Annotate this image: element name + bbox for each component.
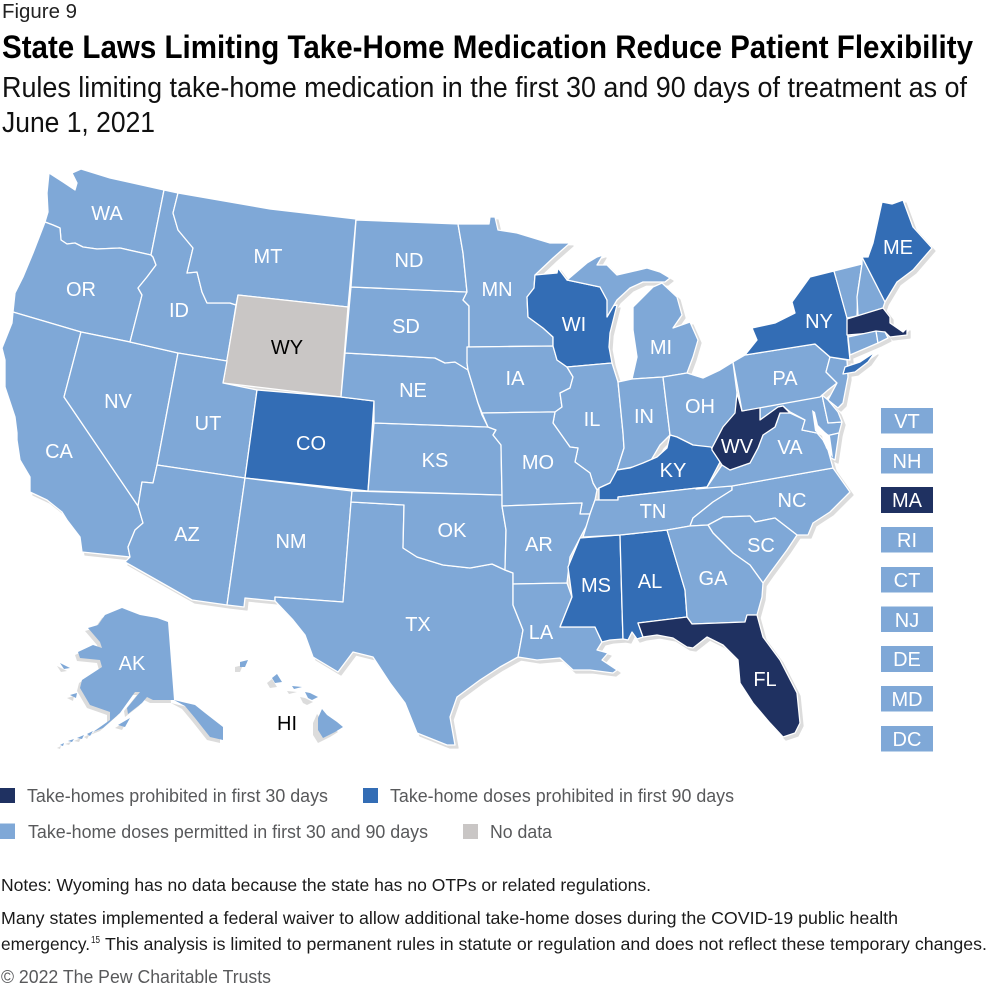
label: IN: IN — [634, 406, 654, 428]
legend item: prohibited first 30 days: Take-homes prohibited in first 30 days — [27, 786, 328, 806]
state abbreviations — [45, 203, 913, 735]
state: TN — [583, 486, 732, 537]
notes: Many states implemented a federal waiver to allow additional take-home doses during the COVID-19 public health — [1, 908, 898, 928]
state: OK — [351, 491, 506, 570]
state: NC — [690, 468, 850, 535]
state: NH — [857, 257, 885, 316]
legend item: prohibited first 90 days: Take-home doses prohibited in first 90 days — [390, 786, 734, 806]
state: AZ — [125, 465, 245, 605]
notes: 15 — [91, 935, 100, 946]
state: PA — [733, 344, 837, 411]
state: WI — [527, 268, 617, 367]
subtitle: June 1, 2021 — [2, 107, 155, 139]
state: OR — [13, 222, 156, 342]
Chesapeake Bay — [812, 410, 833, 458]
state: MT — [173, 193, 356, 307]
state: TX — [275, 502, 523, 745]
label: MI: MI — [650, 337, 672, 359]
state: ND — [351, 220, 467, 292]
state: VT — [834, 264, 862, 318]
state: CO — [245, 390, 374, 491]
state: ID — [130, 190, 236, 361]
key: VT: VT — [894, 411, 920, 433]
figure label: Figure 9 — [2, 1, 77, 23]
label: IL: IL — [584, 409, 600, 431]
map: contiguous United States — [2, 169, 932, 745]
state: MO — [482, 412, 597, 514]
map: Alaska — [60, 608, 223, 746]
state: KS — [368, 423, 502, 495]
label: SC: SC — [747, 535, 775, 557]
state: CT — [848, 331, 878, 355]
state: IN — [617, 377, 670, 470]
label: ID: ID — [169, 300, 189, 322]
small-state key — [881, 408, 933, 752]
notes: Notes: Wyoming has no data because the state has no OTPs or related regulations. — [1, 875, 651, 895]
key: NH — [881, 448, 933, 474]
notes — [1, 875, 987, 954]
HI Oahu — [272, 674, 282, 683]
state: SD — [345, 287, 469, 370]
key: VT — [881, 408, 933, 434]
key: DE — [881, 646, 933, 672]
label: OH: OH — [685, 396, 715, 418]
label: AL: AL — [638, 571, 662, 593]
label: NE: NE — [399, 380, 427, 402]
label: MO: MO — [522, 452, 554, 474]
state: MD — [742, 395, 842, 436]
label: CA: CA — [45, 441, 74, 463]
state: ME — [862, 200, 932, 302]
key: MD — [881, 686, 933, 712]
AK Kodiak and islands — [60, 663, 130, 746]
HI Big Island — [318, 709, 343, 738]
label: ME: ME — [883, 237, 913, 259]
label: MT: MT — [254, 246, 282, 268]
state: WA — [45, 169, 164, 255]
HI Kauai — [240, 660, 248, 667]
state: NV — [64, 332, 178, 506]
state: WY — [223, 295, 348, 397]
state: SC — [708, 516, 797, 583]
state: IL — [553, 363, 624, 490]
label: KY: KY — [660, 460, 686, 482]
state: AK mainland — [78, 608, 174, 732]
label: MN: MN — [481, 279, 513, 301]
label: FL: FL — [753, 669, 777, 691]
label: WY: WY — [271, 337, 303, 359]
label: TN: TN — [640, 501, 666, 523]
state: FL — [638, 615, 800, 737]
state: NE — [341, 353, 488, 427]
label: ND: ND — [395, 250, 423, 272]
copyright: © 2022 The Pew Charitable Trusts — [1, 967, 271, 987]
label: WI: WI — [562, 314, 586, 336]
label: NM: NM — [275, 531, 307, 553]
state: RI — [876, 331, 888, 343]
label: NY: NY — [805, 311, 833, 333]
state: NJ — [826, 357, 848, 408]
label: WA: WA — [91, 203, 123, 225]
state: MN — [458, 217, 570, 347]
label: SD: SD — [392, 316, 420, 338]
key: MA — [881, 487, 933, 513]
legend item: no data — [463, 822, 553, 842]
key: CT — [881, 567, 933, 592]
key: DE: DE — [893, 649, 921, 671]
label: KS: KS — [422, 450, 448, 472]
notes: This analysis is limited to permanent rules in statute or regulation and does not reflect these temporary changes. — [105, 934, 987, 954]
key: RI — [881, 527, 933, 552]
state: DE — [822, 395, 842, 423]
state: NY — [745, 271, 850, 360]
AK panhandle — [174, 700, 223, 740]
legend — [0, 786, 734, 842]
state: GA — [667, 525, 763, 624]
label: TX: TX — [405, 614, 431, 636]
subtitle — [2, 72, 968, 139]
state: AR — [502, 503, 590, 584]
state: MI upper peninsula — [567, 255, 670, 317]
state: VA eastern shore — [826, 433, 839, 460]
label: PA: PA — [772, 368, 798, 390]
key: MD: MD — [891, 689, 923, 711]
legend item: no data: No data — [490, 822, 553, 842]
state: MS — [560, 535, 623, 642]
label: NV: NV — [104, 391, 133, 413]
label: IA: IA — [506, 368, 525, 390]
state: AL — [620, 530, 687, 640]
key: NJ — [881, 606, 933, 632]
key: RI: RI — [897, 530, 917, 552]
label: OK: OK — [438, 520, 467, 542]
state: MA — [847, 308, 907, 337]
HI Molokai — [292, 686, 302, 689]
state: NM — [227, 478, 352, 607]
key: MA: MA — [892, 490, 923, 512]
label: MS: MS — [581, 575, 611, 597]
key: NH: NH — [893, 451, 921, 473]
label: OR: OR — [66, 279, 96, 301]
label: WV: WV — [721, 436, 754, 458]
HI Maui — [305, 692, 318, 700]
key: DC — [881, 726, 933, 752]
label: AZ: AZ — [174, 524, 200, 546]
label: LA: LA — [529, 622, 554, 644]
label: GA: GA — [699, 568, 728, 590]
state: VA — [696, 413, 833, 489]
label: CO: CO — [296, 433, 326, 455]
state: NY Long Island — [843, 352, 875, 374]
state: UT — [157, 353, 257, 478]
key: DC: DC — [893, 729, 921, 751]
map: Hawaii — [240, 660, 343, 738]
label: HI: HI — [277, 713, 297, 735]
state: LA — [513, 583, 617, 673]
label: AK: AK — [119, 653, 146, 675]
key: NJ: NJ — [895, 610, 919, 632]
state: MI lower peninsula — [632, 283, 698, 379]
state: KY — [599, 435, 720, 500]
label: VA: VA — [777, 437, 803, 459]
notes: emergency. — [1, 934, 90, 954]
label: UT: UT — [195, 413, 221, 435]
state: CA — [2, 312, 143, 557]
label: AR: AR — [525, 534, 553, 556]
legend item: permitted: Take-home doses permitted in first 30 and 90 days — [28, 822, 428, 842]
key: CT: CT — [894, 570, 920, 592]
label: NC: NC — [778, 490, 806, 512]
state: IA — [467, 346, 573, 413]
state: OH — [663, 362, 738, 448]
state: WV — [712, 393, 790, 470]
